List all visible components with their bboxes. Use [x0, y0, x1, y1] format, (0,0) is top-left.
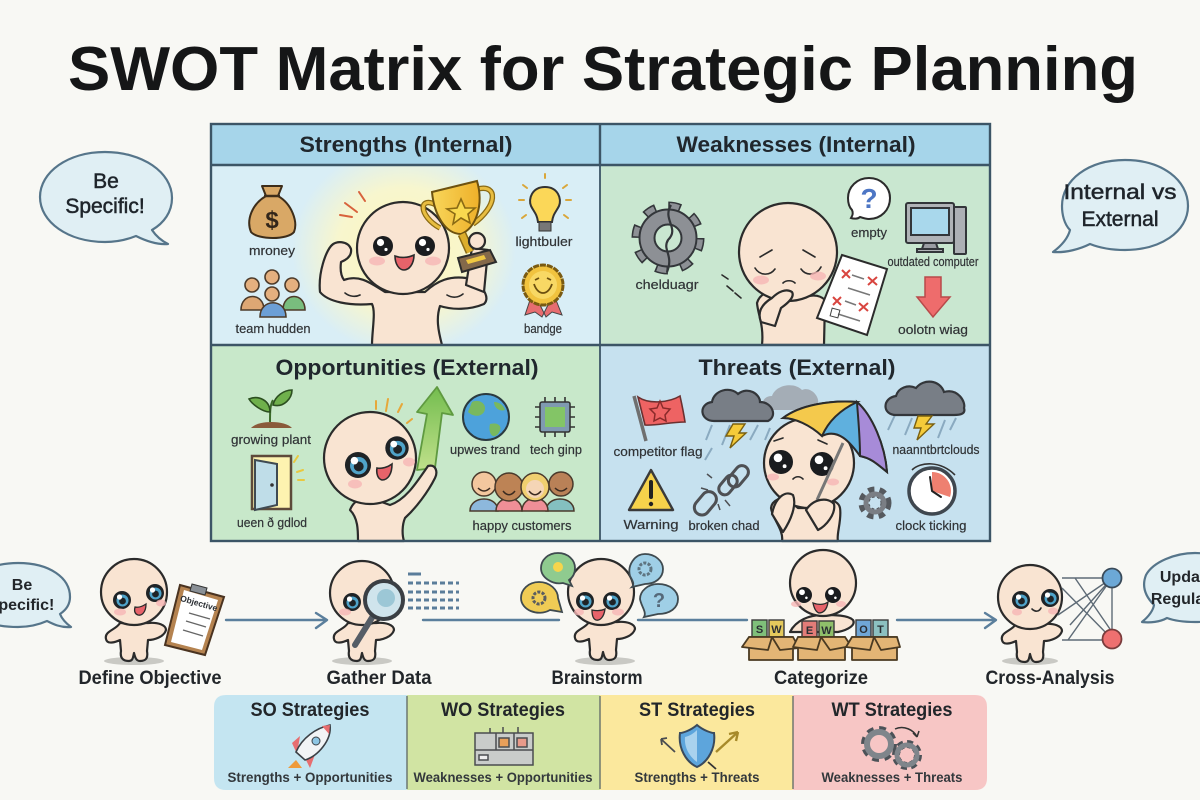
- icon: lightbulb: [519, 174, 571, 231]
- panel: wo strategies: [407, 695, 600, 790]
- callout: be specific top left: Specific!: [65, 195, 145, 218]
- heading: strengths: Strengths (Internal): [300, 132, 512, 157]
- icon: growing plant: [249, 390, 292, 428]
- icon: sorted letter cards: E: [806, 625, 813, 637]
- icon: gears: [865, 728, 919, 766]
- icon: money bag: $: [265, 207, 279, 234]
- SWOT matrix: [211, 124, 990, 541]
- heading: st strategies: ST Strategies: [639, 700, 755, 721]
- arrow: gather to brainstorm: [423, 619, 559, 621]
- callout: be specific bottom left: [0, 563, 71, 627]
- panel: opportunities: [211, 345, 600, 541]
- callout: internal vs external: Internal vs: [1064, 181, 1176, 204]
- panel: wt strategies: [793, 695, 987, 790]
- label: broken chain: broken chad: [688, 518, 760, 533]
- icon: sorted letter cards: O: [859, 624, 868, 636]
- step: categorize: [742, 550, 900, 689]
- icon: team: [241, 270, 305, 317]
- character: worried figure with checklist: [722, 203, 887, 345]
- heading: opportunities: Opportunities (External): [276, 355, 538, 380]
- icon: outdated computer: [906, 203, 966, 254]
- icon: shield: [661, 725, 738, 769]
- label: empty: empty: [851, 225, 888, 240]
- icon: empty speech bubble: [848, 178, 890, 219]
- callout: be specific bottom left: Be: [12, 577, 32, 594]
- icon: globe: [463, 394, 509, 440]
- arrow: define to gather: [226, 613, 327, 628]
- icon: data rows: [408, 574, 459, 608]
- icon: competitor flag: [634, 396, 685, 441]
- step: gather data: [326, 561, 459, 689]
- icon: warning triangle: [629, 470, 673, 510]
- label: badge: bandge: [524, 321, 562, 336]
- label: gather data: Gather Data: [326, 668, 432, 689]
- icon: clock ticking: [909, 464, 955, 514]
- icon: kanban board: [475, 727, 533, 765]
- icon: cross-analysis network: [1058, 568, 1122, 648]
- callout: be specific top left: [40, 152, 172, 244]
- icon: money bag: [249, 186, 295, 238]
- label: define objective: Define Objective: [78, 668, 222, 689]
- icon: rocket: [288, 725, 330, 768]
- character: hopeful figure with arrow: [324, 387, 453, 541]
- label: competitor flag: competitor flag: [614, 444, 702, 459]
- character: strong figure with trophy: [320, 181, 496, 345]
- panel: so strategies: [214, 695, 407, 790]
- arrow: categorize to cross-analysis: [897, 613, 996, 628]
- label: growing plant: growing plant: [231, 432, 311, 447]
- label: clock ticking: clock ticking: [896, 518, 966, 533]
- label: team hudden: team hudden: [236, 321, 310, 336]
- label: strengths + opportunities: Strengths + Opportunities: [228, 769, 393, 785]
- icon: sorted letter cards: W: [771, 624, 782, 636]
- icon: idea bubbles: ?: [653, 590, 665, 612]
- arrow: brainstorm to categorize: [638, 619, 747, 621]
- icon: broken chain: [691, 463, 751, 518]
- icon: happy customers: [470, 472, 574, 511]
- label: lightbulb: lightbuler: [516, 234, 573, 249]
- label: cross-analysis: Cross-Analysis: [986, 668, 1114, 689]
- callout: internal vs external: [1053, 160, 1188, 252]
- label: strengths + threats: Strengths + Threats: [634, 769, 760, 785]
- icon: background cloud: [763, 385, 821, 410]
- label: categorize: Categorize: [774, 668, 868, 689]
- icon: sorted letter cards: [752, 620, 888, 638]
- icon: open door: [252, 456, 304, 510]
- step: brainstorm: [521, 553, 678, 689]
- panel: weaknesses: [600, 124, 990, 345]
- heading: so strategies: SO Strategies: [250, 700, 370, 721]
- character: scared figure with umbrella: [764, 402, 887, 541]
- icon: down arrow: [917, 277, 950, 317]
- label: outdated computer: outdated computer: [888, 254, 979, 269]
- divider lines: [407, 696, 793, 789]
- icon: clipboard: [165, 584, 224, 655]
- label: upward trend: upwes trand: [450, 442, 520, 457]
- label: happy customers: happy customers: [472, 518, 572, 533]
- label: declining: oolotn wiag: [898, 322, 968, 337]
- label: weaknesses + opportunities: Weaknesses + Opportunities: [414, 769, 593, 785]
- label: warning: Warning: [624, 517, 678, 532]
- icon: clipboard: Objective: [179, 593, 219, 613]
- label: open door: ueen ð gdlod: [237, 515, 307, 530]
- icon: sorted letter cards: S: [756, 624, 763, 636]
- title: SWOT Matrix for Strategic Planning: [68, 35, 1138, 104]
- icon: empty speech bubble: ?: [860, 183, 878, 214]
- matrix grid lines: [211, 124, 990, 541]
- icon: storm cloud right: [886, 382, 964, 440]
- icon: tech chip: [535, 397, 575, 437]
- callout: be specific top left: Be: [93, 170, 119, 193]
- panel: threats: [600, 345, 990, 541]
- label: tech chip: tech ginp: [530, 442, 582, 457]
- heading: threats: Threats (External): [698, 355, 896, 380]
- label: brainstorm: Brainstorm: [552, 668, 642, 689]
- callout: internal vs external: External: [1081, 208, 1159, 231]
- icon: broken gear: [637, 205, 699, 272]
- icon: sorted letter cards: T: [877, 624, 884, 636]
- panel: st strategies: [600, 695, 793, 790]
- icon: idea bubbles: [521, 553, 678, 617]
- label: broken gear: chelduagr: [636, 277, 699, 292]
- icon: small gear: [864, 492, 886, 514]
- label: storm clouds: naanntbrtclouds: [892, 442, 980, 457]
- step: cross-analysis: [986, 565, 1122, 689]
- callout: update regularly: [1142, 553, 1200, 622]
- label: weaknesses + threats: Weaknesses + Threats: [822, 769, 963, 785]
- icon: magnifying glass: [355, 581, 403, 645]
- step: define objective: [78, 559, 224, 689]
- icon: storm cloud with rain: [702, 390, 773, 460]
- heading: wo strategies: WO Strategies: [441, 700, 565, 721]
- strategies row: [214, 695, 987, 790]
- icon: badge: [523, 265, 563, 317]
- icon: sorted letter cards: W: [821, 625, 832, 637]
- label: money: mroney: [249, 243, 296, 258]
- icon: cardboard boxes: [742, 637, 900, 660]
- heading: wt strategies: WT Strategies: [832, 700, 952, 721]
- heading: weaknesses: Weaknesses (Internal): [676, 132, 916, 157]
- panel: strengths: [211, 124, 600, 354]
